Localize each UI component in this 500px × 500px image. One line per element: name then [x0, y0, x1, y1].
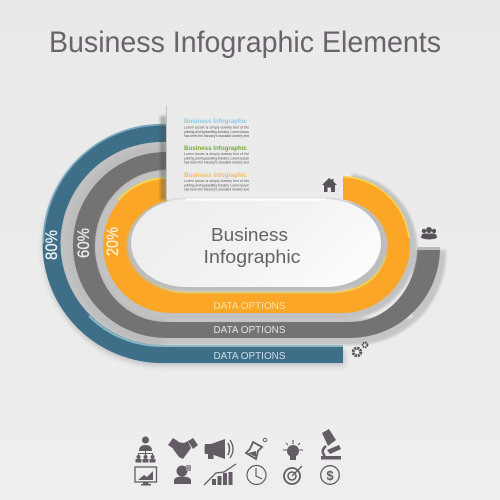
heading: green: Business Infographic: [184, 145, 247, 152]
label: infographic: Infographic: [204, 246, 300, 267]
icon: clock: [247, 466, 266, 484]
text block: blue: Lorem Ipsum is simply dummy text of the: [184, 126, 249, 130]
panel: orange 20% band: [96, 170, 417, 320]
heading: orange: Business Infographic: [184, 172, 247, 179]
panel: central capsule: [127, 199, 387, 292]
label: 60%: 60%: [74, 228, 93, 258]
icon: dollar: [321, 466, 339, 484]
label: business: Business: [211, 224, 288, 245]
label: grey data options: DATA OPTIONS: [214, 324, 286, 336]
text block: green: [184, 152, 249, 164]
icon row: business icons: [135, 429, 341, 486]
panel: blue 80% band: [42, 124, 345, 366]
text block: blue: [184, 126, 249, 138]
label: 80%: 80%: [42, 230, 61, 260]
text block: green: has been the industry's standard dummy text: [184, 160, 249, 164]
icon: flask: [246, 438, 267, 459]
heading: blue: Business Infographic: [184, 118, 247, 125]
icon: megaphone: [204, 439, 233, 459]
icon: people: [421, 227, 437, 240]
text block: orange: has been the industry's standard dummy text: [184, 188, 249, 192]
label: blue data options: DATA OPTIONS: [214, 350, 286, 362]
icon: monitor: [135, 467, 156, 486]
icon: microscope: [321, 429, 341, 460]
icon: house: [322, 178, 337, 192]
text block: orange: Lorem Ipsum is simply dummy text of the: [184, 179, 249, 183]
text block: orange: printing and typesetting industry. Lorem Ipsum: [184, 183, 249, 187]
text block: orange: [184, 179, 249, 192]
icon: gears: [353, 343, 367, 356]
panel: document sheet: [160, 105, 263, 203]
text block: green: printing and typesetting industry. Lorem Ipsum: [184, 156, 249, 160]
icon: dollar: $: [326, 468, 334, 483]
title: Business Infographic Elements: [49, 26, 441, 59]
icon: growth chart: [204, 464, 236, 485]
icon: person: [174, 465, 191, 484]
icon: handshake: [168, 438, 198, 459]
text block: blue: printing and typesetting industry. Lorem Ipsum: [184, 130, 249, 134]
icon: org chart: [136, 436, 156, 462]
icon: light bulb: [283, 440, 303, 460]
label: 20%: 20%: [103, 227, 122, 256]
panel: grey 60% band: [67, 145, 446, 345]
label: orange data options: DATA OPTIONS: [214, 300, 286, 312]
text block: green: Lorem Ipsum is simply dummy text of the: [184, 152, 249, 156]
icon: target: [284, 466, 302, 484]
text block: blue: has been the industry's standard dummy text: [184, 134, 249, 138]
